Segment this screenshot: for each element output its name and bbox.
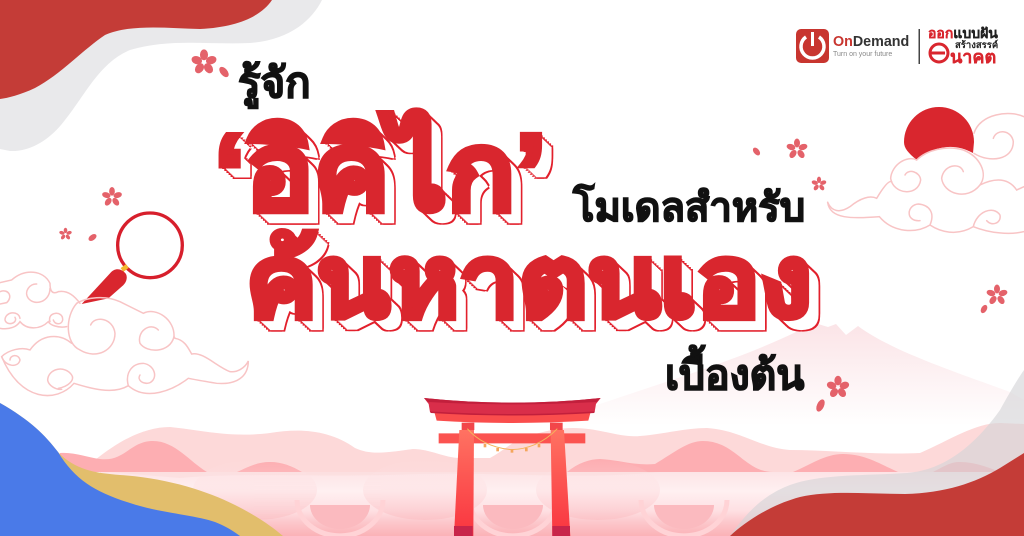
petal: right (751, 146, 762, 157)
blossom: near mountain (826, 376, 850, 399)
mountain (540, 324, 1024, 460)
shape: red bottom right wave (730, 453, 1024, 536)
heading: model for: โมเดลสำหรับ (573, 186, 805, 230)
logo: slogan line 2: สร้างสรรค์ (955, 40, 998, 51)
water (100, 460, 1024, 536)
petal: far right (979, 304, 989, 314)
logo divider (918, 29, 920, 64)
logo: slogan line 3: นาคต (950, 47, 996, 67)
blossom: far right (986, 284, 1008, 305)
sun (904, 107, 974, 160)
blossom: left small (59, 228, 72, 240)
blossom: top left (190, 49, 218, 75)
water bowls: inner (310, 505, 714, 529)
shape: blue wave bottom left (0, 403, 240, 536)
shape: gold wave bottom left (0, 403, 283, 536)
logo: slogan line 1: ออกแบบฝัน (928, 25, 998, 41)
torii gate (424, 398, 601, 536)
logo icon: power button (796, 29, 829, 63)
shape: grey bottom right wave (730, 370, 1024, 536)
heading: intro line: รู้จัก (238, 59, 311, 106)
shape: grey wave top left (0, 0, 322, 151)
heading: basic: เบื้องต้น (665, 352, 804, 398)
hills: darker range (60, 441, 1000, 472)
blossom: right (786, 138, 808, 159)
blossom: left (101, 187, 123, 207)
petal: left (87, 233, 98, 242)
petal: near mountain (815, 398, 826, 413)
magnifying glass (82, 213, 182, 304)
water bowls: upper (193, 460, 660, 520)
logo icon: future mark (930, 44, 948, 62)
blossom: right small (811, 177, 827, 191)
water bowls: rings (297, 500, 727, 536)
heading: self discovery: ค้นหาตนเอง (246, 226, 812, 338)
logo: OnDemand wordmark: OnDemand (833, 34, 909, 50)
petal: top left (217, 65, 231, 79)
cloud: right (828, 114, 1024, 233)
heading: ikigai: ‘อิคิไก’ (214, 111, 547, 232)
logo: tagline: Turn on your future (833, 51, 892, 58)
shape: red wave top left (0, 0, 272, 99)
cherry blossoms (59, 49, 1008, 413)
cloud: left (0, 272, 248, 396)
hills: pale range (60, 423, 1024, 472)
